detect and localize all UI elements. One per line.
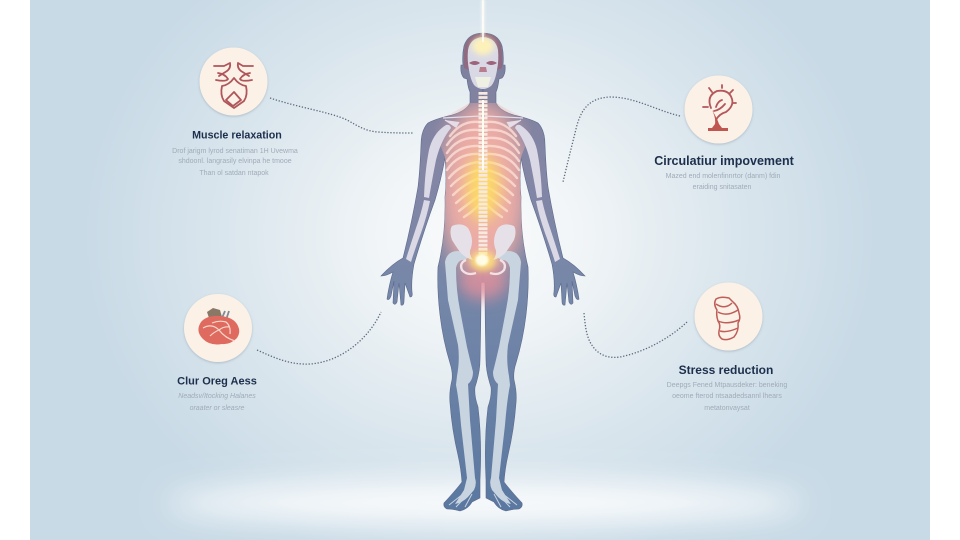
description: circulation improvement: eraiding snitasaten <box>693 184 751 191</box>
description: clear organs: oraater or sleasre <box>190 405 245 412</box>
description: muscle relaxation: shdoonl. langrasily elvinpa he tmooe <box>178 158 292 165</box>
spine <box>478 92 488 262</box>
icon: heart organ <box>184 294 252 362</box>
description: muscle relaxation: Than ol satdan ntapok <box>199 170 269 177</box>
description: stress reduction: Deepgs Fened Mtpausdeker: beneking <box>667 382 787 389</box>
torso warm glow <box>439 102 527 300</box>
panel: circulation improvement <box>563 76 795 191</box>
pelvic glow <box>470 251 496 271</box>
description: stress reduction <box>667 382 787 412</box>
description: clear organs <box>178 393 256 412</box>
heading: stress reduction: Stress reduction <box>679 363 773 377</box>
icon: circulation improvement <box>684 76 752 144</box>
description: circulation improvement: Mazed end molenfinnrtor (danm) fdin <box>666 173 780 180</box>
description: stress reduction: oeome fterod ntsaadedsannl lhears <box>672 393 782 400</box>
heading: clear organs: Clur Oreg Aess <box>177 376 257 388</box>
heading: muscle relaxation: Muscle relaxation <box>192 130 282 142</box>
bones <box>406 116 560 507</box>
description: muscle relaxation: Drof jarigm lyrod senatiman 1H Uvewma <box>172 148 298 155</box>
panel: clear organs <box>177 294 381 412</box>
yellow core glow <box>466 154 500 222</box>
panel: muscle relaxation <box>172 48 414 177</box>
ribs <box>447 122 519 217</box>
heading: circulation improvement: Circulatiur impovement <box>654 154 795 168</box>
description: circulation improvement <box>666 173 780 191</box>
connector: circulation improvement <box>563 97 680 182</box>
icon: muscle relaxation <box>200 48 268 116</box>
light beam <box>481 0 485 42</box>
description: muscle relaxation <box>172 148 298 177</box>
connector: stress reduction <box>584 313 687 357</box>
description: clear organs: Neadsv/Itocking Halanes <box>178 393 256 400</box>
connector: clear organs <box>257 312 381 364</box>
human body figure <box>381 0 585 511</box>
icon: stress reduction <box>694 282 762 350</box>
skull <box>464 33 502 89</box>
panel: stress reduction <box>584 282 787 412</box>
head glow <box>472 37 494 55</box>
connector: muscle relaxation <box>270 98 414 133</box>
description: stress reduction: metatonvaysat <box>704 405 750 412</box>
